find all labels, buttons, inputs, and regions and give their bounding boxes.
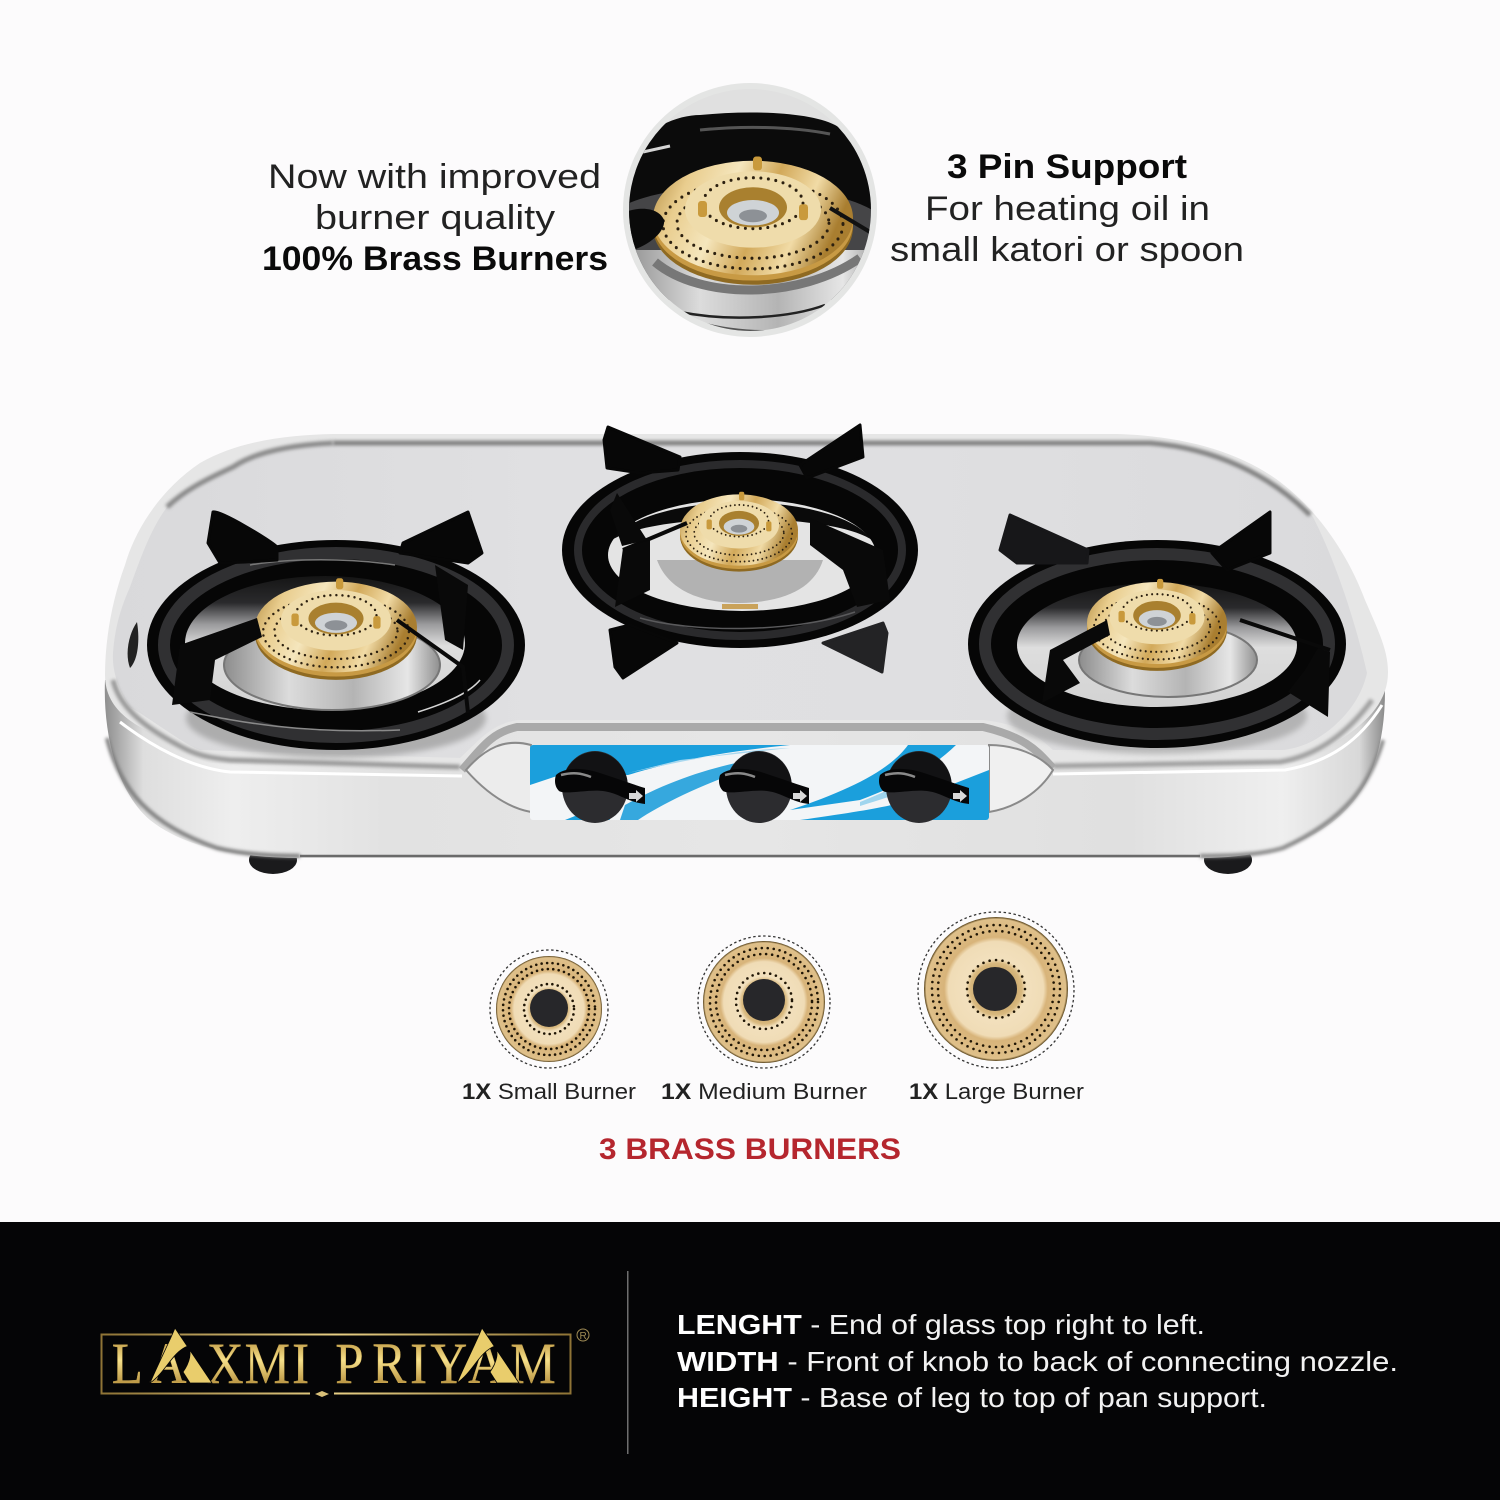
small burner label: 1X Small Burner — [462, 1079, 636, 1104]
stove top plate — [105, 434, 1388, 770]
text block: 3 pin support: 3 Pin Support — [947, 148, 1187, 186]
small burner icon — [490, 950, 608, 1068]
dimension definitions: HEIGHT - Base of leg to top of pan support. — [677, 1382, 1267, 1413]
medium burner label: 1X Medium Burner — [661, 1079, 867, 1104]
middle burner — [562, 425, 918, 678]
knob control panel — [530, 745, 989, 823]
gas stove product illustration — [105, 425, 1388, 874]
brand logo: LAXMIPRIYAM — [112, 1331, 556, 1396]
reflection blob left edge — [128, 622, 138, 668]
text block: 3 pin support: For heating oil in — [925, 190, 1210, 228]
stove feet — [249, 846, 1252, 874]
right burner — [968, 512, 1346, 754]
left burner — [147, 512, 525, 758]
text block: improved burner quality: 100% Brass Burners — [262, 240, 608, 278]
large burner icon — [918, 912, 1074, 1068]
dimension definitions: WIDTH - Front of knob to back of connecting nozzle. — [677, 1346, 1398, 1377]
text block: 3 pin support: small katori or spoon — [890, 231, 1244, 269]
burner size row — [462, 912, 1084, 1104]
large burner label: 1X Large Burner — [909, 1079, 1084, 1104]
text block: improved burner quality: burner quality — [315, 199, 555, 237]
dimension definitions — [677, 1309, 1398, 1413]
stove body skirt — [105, 680, 1385, 858]
text block: improved burner quality — [262, 158, 608, 278]
heading: 3 brass burners: 3 BRASS BURNERS — [599, 1133, 901, 1166]
medium burner icon — [698, 936, 830, 1068]
text block: improved burner quality: Now with improved — [268, 158, 601, 196]
brand logo: R — [580, 1331, 587, 1342]
zoomed burner circle — [620, 80, 882, 342]
dimension definitions: LENGHT - End of glass top right to left. — [677, 1309, 1205, 1340]
recess beside knob panel — [466, 743, 531, 812]
text block: 3 pin support — [890, 148, 1244, 269]
footer band — [0, 1222, 1500, 1500]
